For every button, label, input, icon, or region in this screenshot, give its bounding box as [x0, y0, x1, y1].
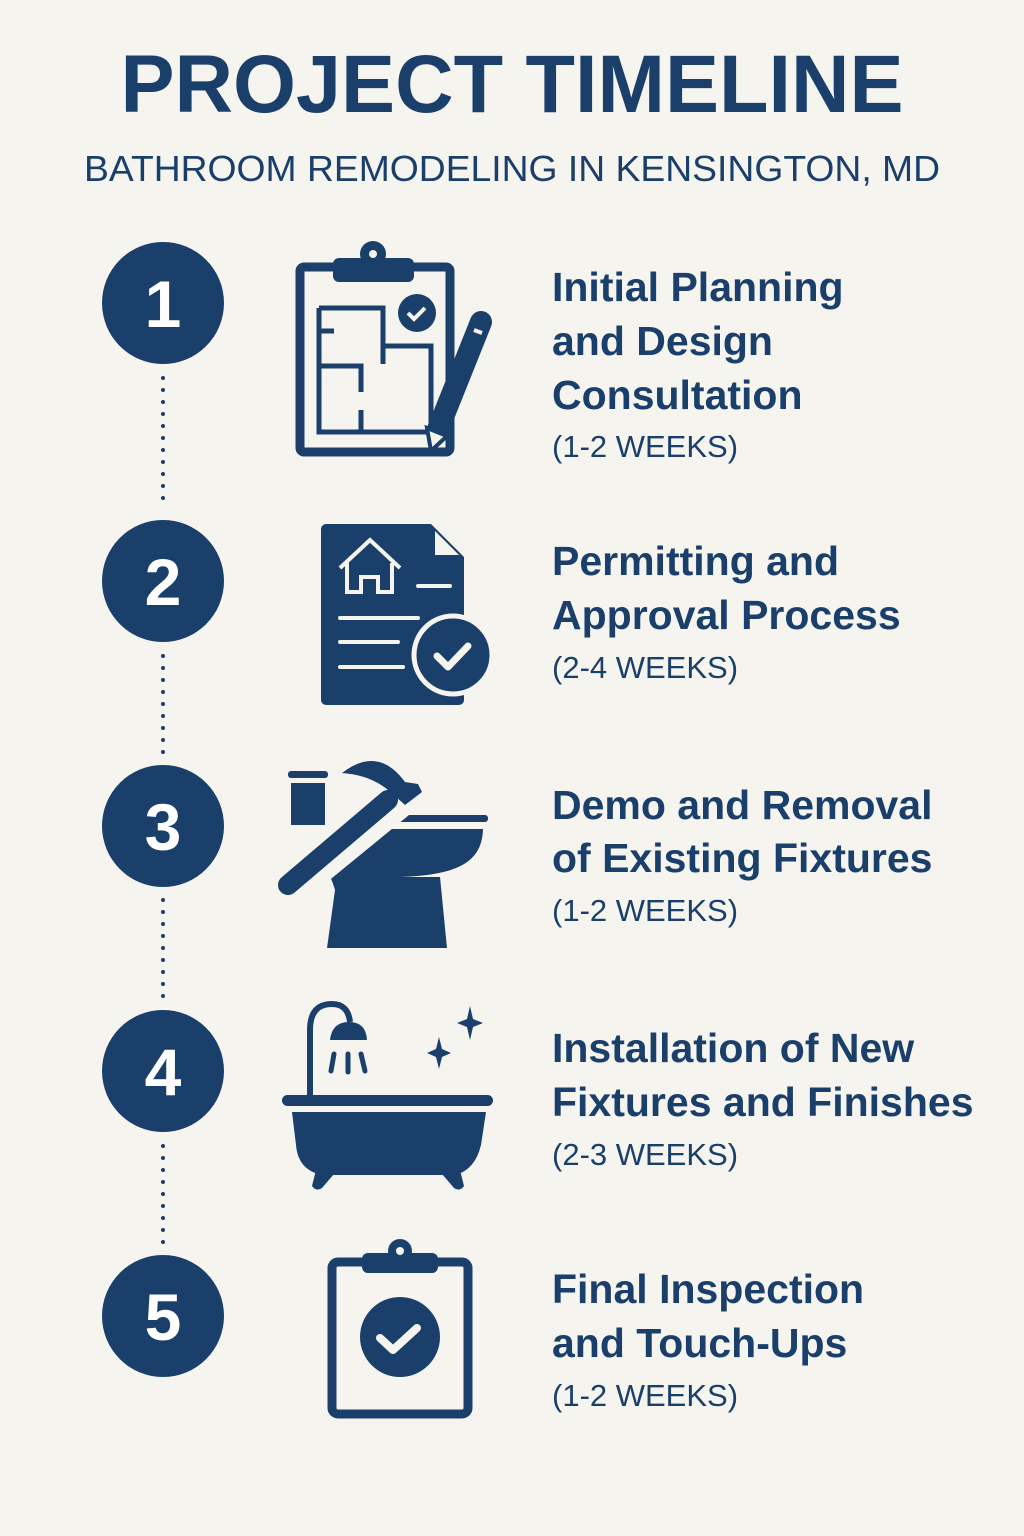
number circle 3	[102, 765, 224, 887]
number circle 2: 2	[145, 545, 181, 619]
text: step 1: (1-2 WEEKS)	[552, 429, 738, 464]
number circle 4: 4	[145, 1035, 182, 1109]
number circle 4	[102, 1010, 224, 1132]
text: step 4: Installation of New	[552, 1025, 914, 1071]
text: step 4: (2-3 WEEKS)	[552, 1137, 738, 1172]
number circle 2	[102, 520, 224, 642]
text: step 5: (1-2 WEEKS)	[552, 1378, 738, 1413]
subtitle: BATHROOM REMODELING IN KENSINGTON, MD	[84, 148, 940, 189]
text: step 3: (1-2 WEEKS)	[552, 893, 738, 928]
step 4	[102, 1004, 974, 1190]
icon: clipboard with floor plan and pencil	[300, 241, 482, 452]
icon: clipboard with check	[332, 1239, 468, 1414]
text: step 3	[552, 782, 932, 928]
step 5	[102, 1239, 864, 1414]
icon: bathtub with shower	[282, 1004, 493, 1190]
text: step 5	[552, 1266, 864, 1413]
text: step 1: Consultation	[552, 372, 803, 418]
number circle 1: 1	[145, 267, 181, 341]
icon: permit document	[321, 524, 492, 705]
title: PROJECT TIMELINE	[120, 39, 904, 130]
text: step 4: Fixtures and Finishes	[552, 1079, 974, 1125]
text: step 5: and Touch-Ups	[552, 1320, 847, 1366]
step 1	[102, 241, 844, 464]
text: step 3: of Existing Fixtures	[552, 835, 932, 881]
text: step 1: and Design	[552, 318, 773, 364]
text: step 3: Demo and Removal	[552, 782, 932, 828]
text: step 1	[552, 264, 844, 464]
number circle 3: 3	[145, 790, 181, 864]
text: step 2: Approval Process	[552, 592, 901, 638]
step 3	[102, 761, 932, 948]
text: step 5: Final Inspection	[552, 1266, 864, 1312]
text: step 2	[552, 538, 901, 685]
icon: toilet with hammer	[288, 761, 488, 948]
number circle 5	[102, 1255, 224, 1377]
text: step 4	[552, 1025, 974, 1172]
text: step 2: Permitting and	[552, 538, 839, 584]
number circle 5: 5	[145, 1280, 181, 1354]
step 2	[102, 520, 901, 705]
text: step 1: Initial Planning	[552, 264, 844, 310]
number circle 1	[102, 242, 224, 364]
text: step 2: (2-4 WEEKS)	[552, 650, 738, 685]
